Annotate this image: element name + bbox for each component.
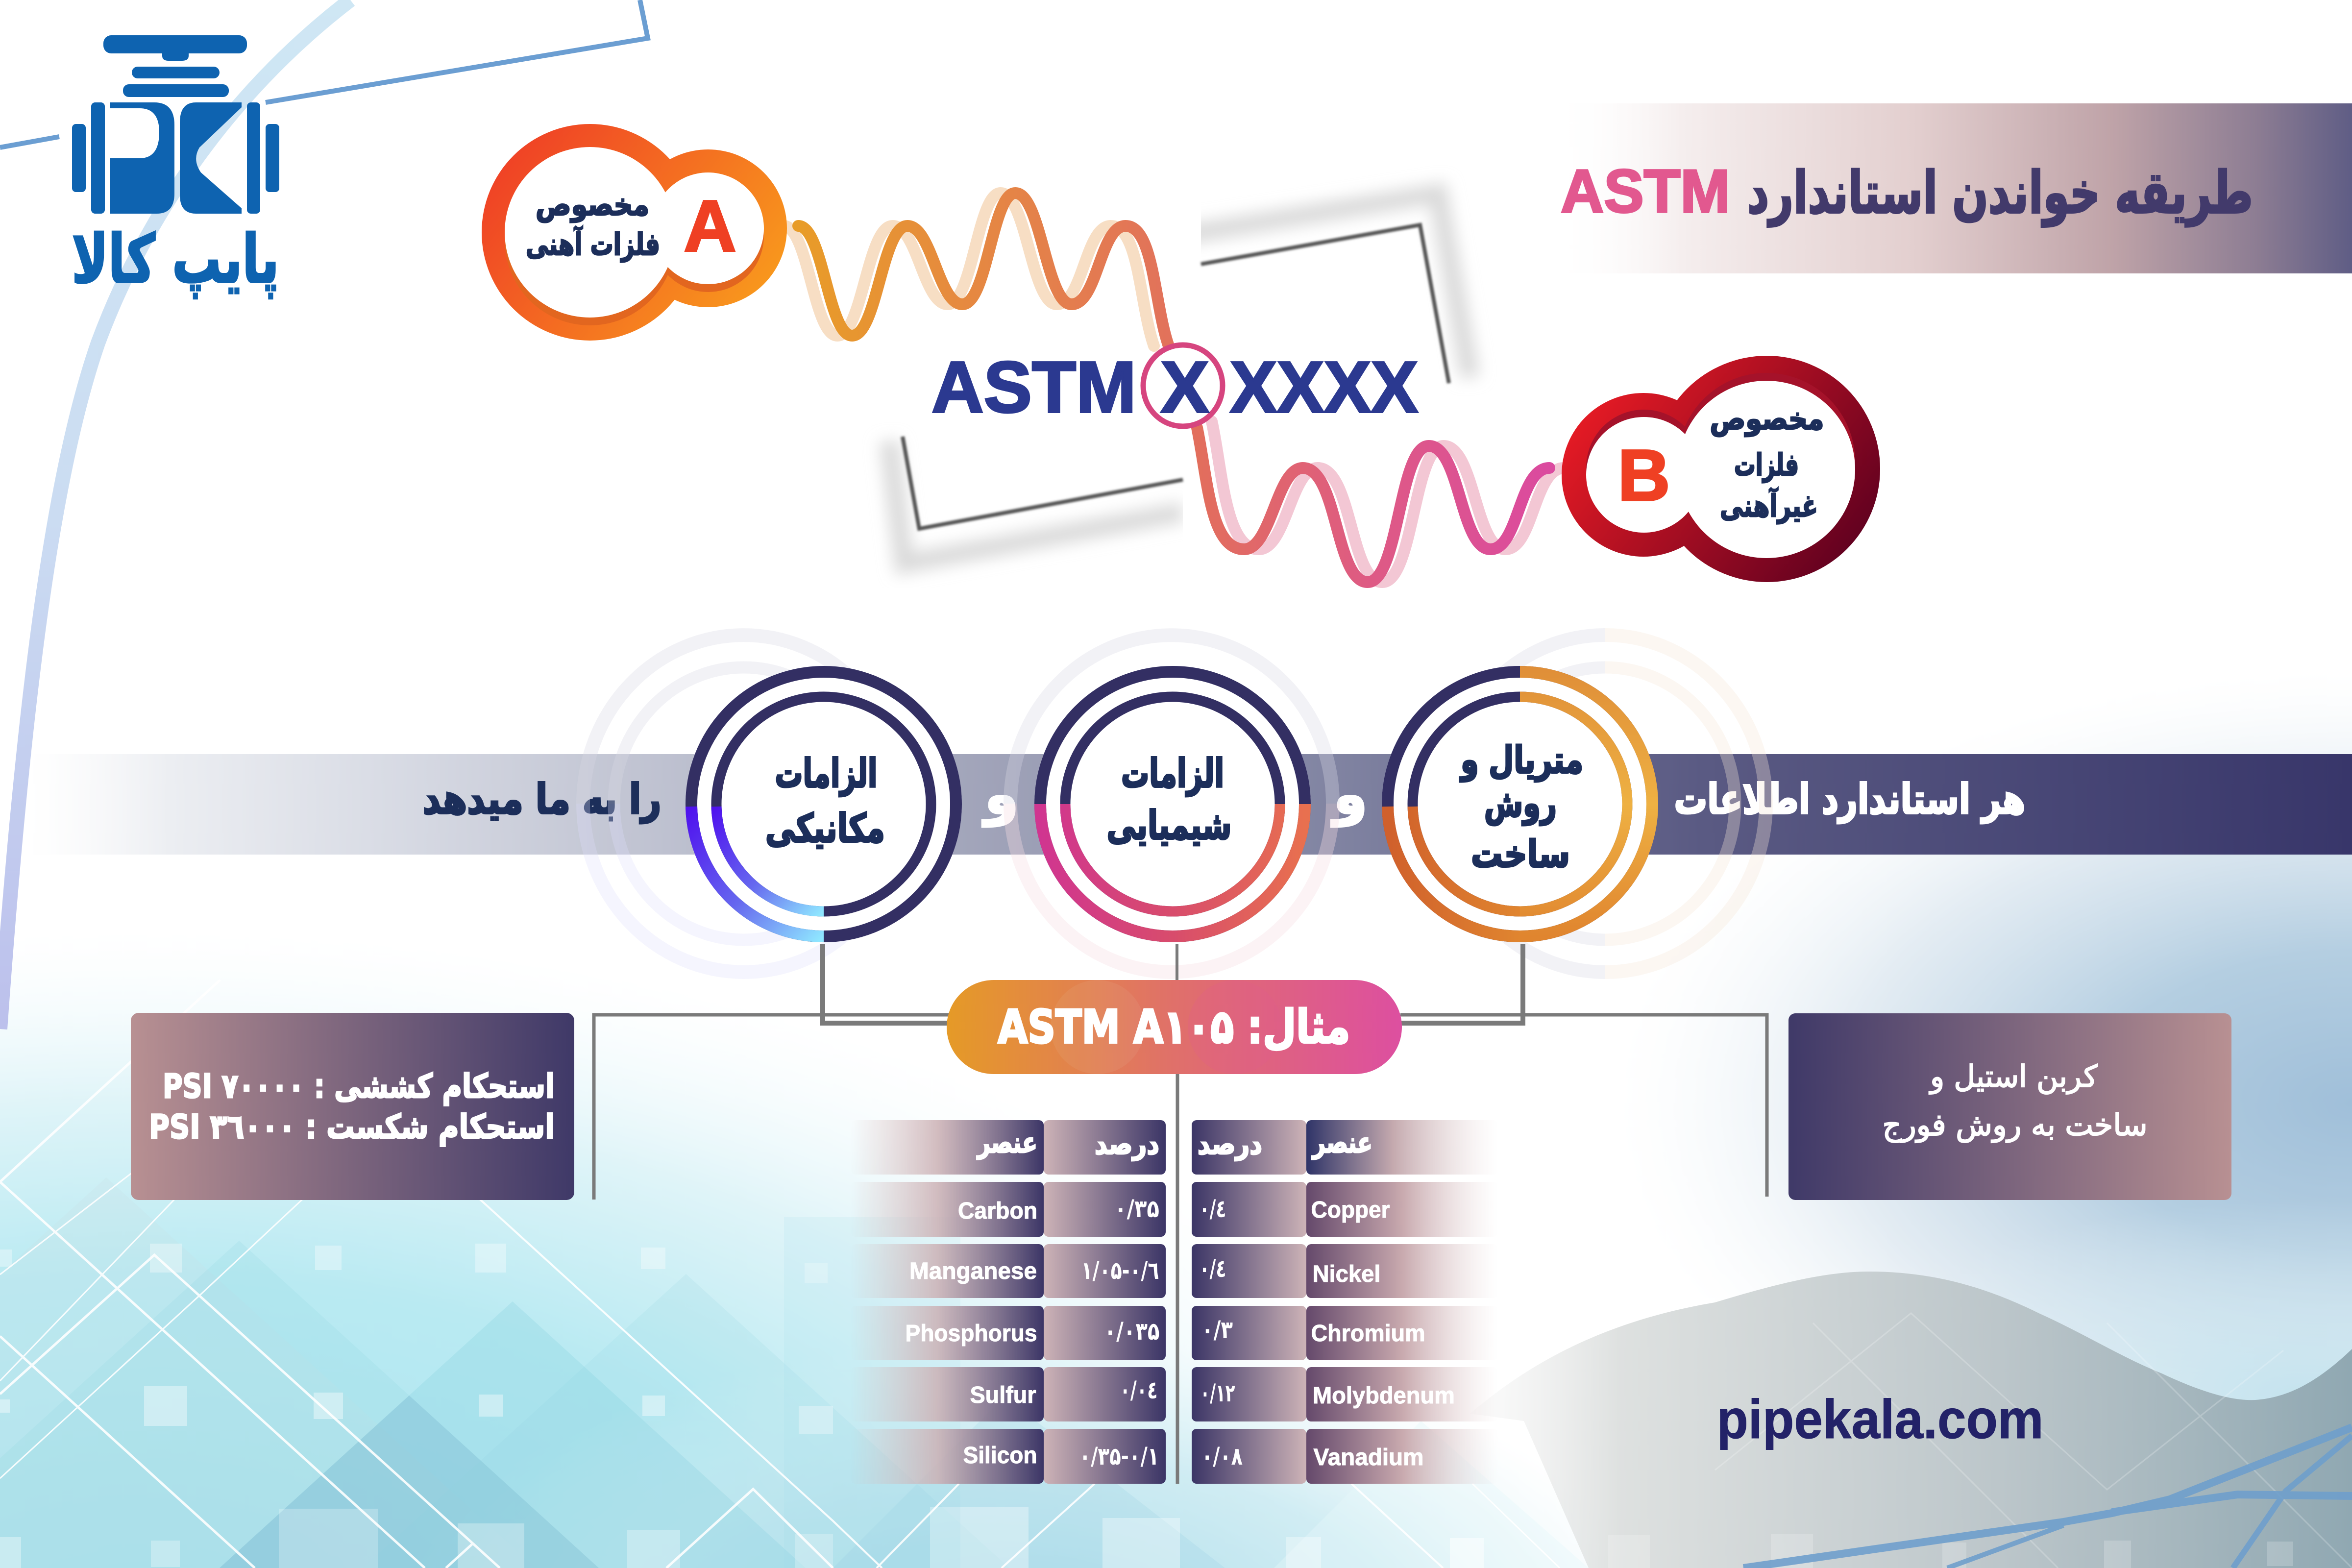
row silicon: Silicon [963,1443,1037,1469]
table: left composition [851,1120,1166,1484]
circled X [1143,345,1223,428]
letter B: B [1618,435,1670,516]
frame brackets with shadow [889,194,1470,564]
row manganese: ۱/۰۵-۰/٦ [1081,1256,1159,1285]
row chromium: Chromium [1311,1321,1425,1347]
circle: mechanical requirements: مکانیکی [765,806,885,851]
circle: chemical requirements: شیمیایی [1106,803,1232,848]
row vanadium: ۰/۰۸ [1201,1442,1243,1470]
header row: عنصر [1312,1126,1372,1160]
circle: mechanical requirements [686,666,962,942]
band text right: هر استاندارد اطلاعات [1674,775,2026,824]
header row: عنصر [977,1126,1037,1160]
panel: B badge: غیرآهنی [1720,487,1818,524]
circle: material and method: ساخت [1471,832,1570,876]
row carbon [851,1182,1166,1237]
row molybdenum [1192,1367,1498,1421]
heading: ASTM X XXXX: ASTM [931,347,1136,428]
pill text: مثال: ASTM A۱۰۵ [998,1001,1350,1054]
info band [29,754,2352,855]
circled X: X [1161,347,1209,428]
description text: کربن استیل و [1929,1058,2098,1094]
example pill [947,980,1402,1074]
row phosphorus [851,1306,1166,1360]
circle: chemical requirements [1034,666,1311,942]
heading: ASTM X XXXX: XXXX [1230,347,1418,428]
label: متریال و [1459,738,1583,782]
label: الزامات [1121,751,1224,797]
row nickel [1192,1244,1498,1298]
decorative wave bottom right [1470,1272,2352,1568]
decorative arc top left [0,0,648,1029]
table: right composition [1192,1120,1498,1484]
row sulfur: Sulfur [970,1382,1036,1408]
logo text: پایپ کالا [72,221,279,298]
row carbon: ۰/۳۵ [1114,1195,1159,1223]
row chromium [1192,1306,1498,1360]
header row [851,1120,1166,1175]
row molybdenum: ۰/۱۲ [1200,1379,1235,1407]
A description: مخصوص [536,187,649,223]
row vanadium [1192,1429,1498,1484]
header row [1192,1120,1498,1175]
row nickel: Nickel [1312,1261,1381,1287]
wave connector A [784,193,1169,346]
heading: title band [1553,103,2352,273]
row manganese: Manganese [909,1258,1037,1284]
row vanadium: Vanadium [1313,1445,1424,1470]
icon: valve [72,35,279,214]
row molybdenum: Molybdenum [1313,1383,1455,1409]
heading: ASTM X XXXX [931,345,1418,428]
row nickel: ۰/٤ [1200,1254,1226,1283]
header row: درصد [1095,1127,1159,1161]
B description: مخصوص [1710,401,1824,437]
circle: material and method [1382,666,1658,942]
header row: درصد [1198,1127,1262,1161]
band text left: را به ما میدهد [422,775,662,824]
row manganese [851,1244,1166,1298]
yield strength: استحکام شکست : ٣٦٠٠٠ PSI [149,1108,555,1147]
circle: material and method: روش [1484,782,1557,826]
row phosphorus: Phosphorus [906,1321,1037,1347]
panel: B badge: فلزات [1734,447,1799,483]
row sulfur [851,1367,1166,1421]
title ASTM: ASTM [1561,158,1730,225]
letter A: A [684,186,736,267]
panel: material description [1788,1013,2231,1200]
row silicon: ۰/۳۵-۰/۱ [1079,1442,1159,1470]
row phosphorus: ۰/۰۳۵ [1104,1317,1159,1346]
row silicon [851,1429,1166,1484]
panel: material description: ساخت به روش فورج [1883,1107,2147,1143]
connectors [594,944,1767,1484]
website url: pipekala.com [1717,1389,2043,1450]
row carbon: Carbon [958,1198,1037,1224]
panel: mechanical values [131,1013,574,1200]
conjunction left: و [982,763,1019,827]
tensile strength: استحکام کششی : ۷۰۰۰۰ PSI [163,1067,555,1106]
conjunction right: و [1331,763,1368,827]
row chromium: ۰/۳ [1201,1316,1233,1344]
label: الزامات [775,751,877,797]
panel: A badge [482,124,787,341]
panel: A badge: فلزات آهنی [526,225,660,262]
row copper: Copper [1311,1197,1390,1223]
wave connector B [1197,421,1564,582]
logo [72,35,279,298]
row sulfur: ۰/۰٤ [1120,1376,1157,1404]
row copper [1192,1182,1498,1237]
faint rings [583,635,1766,972]
row copper: ۰/٤ [1200,1195,1226,1223]
panel: B badge [1562,356,1880,582]
